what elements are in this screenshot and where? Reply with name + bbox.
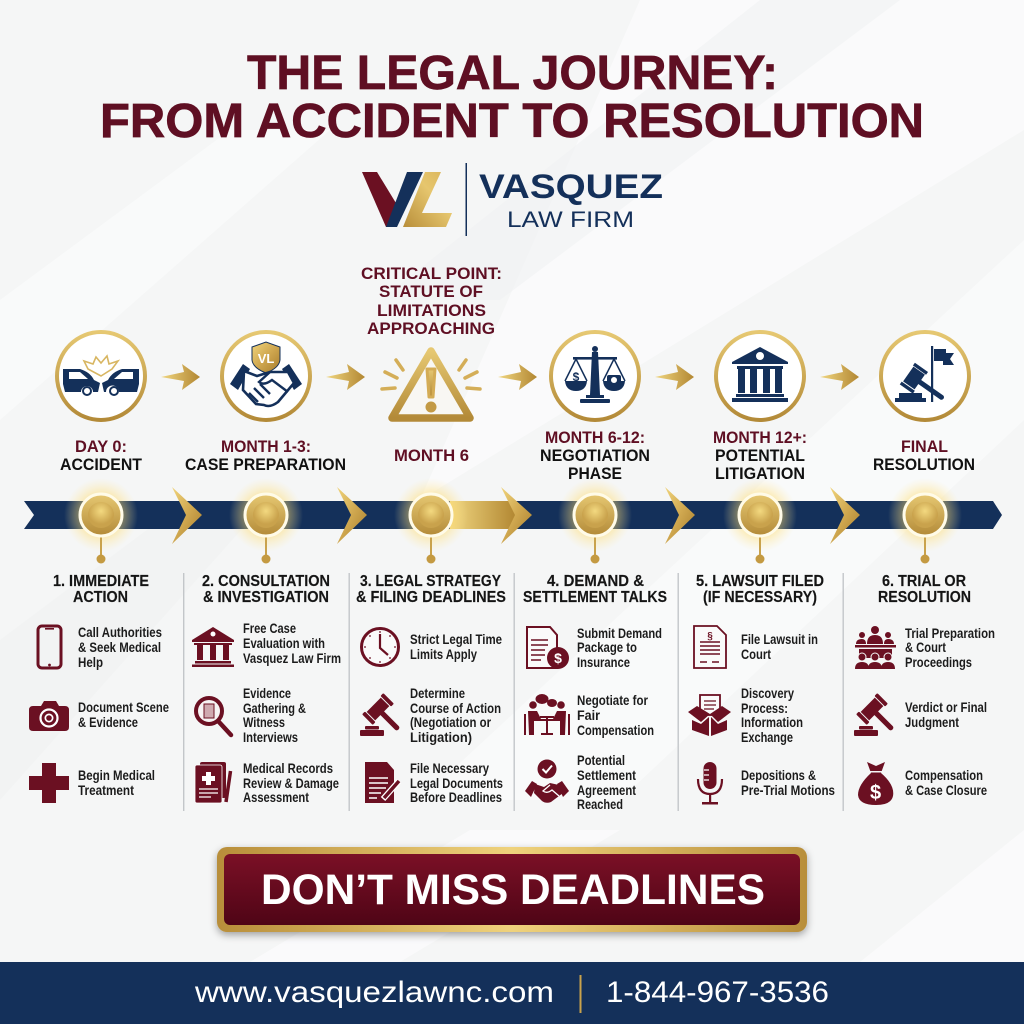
text [577,692,654,738]
icon: car accident [57,332,145,420]
icon: scales of justice: $ [573,370,580,384]
icon: courthouse [192,627,234,667]
text: Course of Action [410,700,501,716]
text: Settlement [577,767,636,783]
heading [53,573,149,606]
timeline label: Day 0: ACCIDENT [60,456,142,474]
icon: lawsuit document: § [707,631,713,642]
callout: critical point: LIMITATIONS [377,302,486,320]
icon: lawsuit document [694,626,726,668]
icon: magnifying glass [196,698,231,735]
text: Negotiate for [577,692,648,708]
text: Witness [243,714,285,730]
text: Discovery [741,685,794,701]
panel: step 4 demand and settlement [523,573,667,812]
timeline label: Month 6-12: PHASE [568,465,622,483]
panel: step 1 immediate action [29,573,169,803]
text: Strict Legal Time [410,631,502,647]
arrow [326,364,365,390]
text: Information [741,714,803,730]
icon: medical cross [29,763,69,803]
node 5 [739,494,781,564]
heading: 1. IMMEDIATE [53,573,149,590]
icon: scales of justice [551,332,639,420]
text: Verdict or Final [905,699,987,715]
text: Call Authorities [78,624,162,640]
node 2 [245,494,287,564]
footer bar [0,962,1024,1024]
heading [356,573,506,606]
text [410,685,501,745]
icon: handshake with shield: VL [258,351,274,366]
node 4 [574,494,616,564]
node 1 [80,494,122,564]
text: Assessment [243,789,309,805]
call to action button [217,847,807,932]
text [905,767,987,798]
text [577,752,636,812]
timeline label: Final: RESOLUTION [873,456,975,474]
text: Compensation [905,767,983,783]
call to action button: DON’T MISS DEADLINES [261,866,765,914]
text: Evidence [243,685,291,701]
timeline label: Month 12+: LITIGATION [715,465,805,483]
text: Free Case [243,620,296,636]
text: Compensation [577,722,654,738]
timeline label: Month 12+: POTENTIAL [715,447,805,465]
text: Reached [577,796,623,812]
timeline label: Month 6: MONTH 6 [394,447,469,465]
logo: Vasquez Law Firm [362,163,663,236]
text [741,685,803,745]
heading: & FILING DEADLINES [356,589,506,606]
icon: courthouse [716,332,804,420]
title [100,47,924,148]
callout: critical point: CRITICAL POINT: [361,265,502,283]
text: & Court [905,639,946,655]
text: Evaluation with [243,635,325,651]
text: Treatment [78,782,134,798]
text: Begin Medical [78,767,155,783]
arrow [498,364,537,390]
heading: & INVESTIGATION [203,589,329,606]
text: (Negotiation or [410,714,491,730]
arrow [820,364,859,390]
footer bar: 1-844-967-3536 [606,976,829,1009]
logo: Vasquez Law Firm: VASQUEZ [479,168,663,206]
heading: 2. CONSULTATION [202,573,330,590]
timeline label: Month 6-12: MONTH 6-12: [545,429,645,447]
icon: settlement handshake [525,760,569,803]
text: Vasquez Law Firm [243,650,341,666]
text: Exchange [741,729,793,745]
panel: step 2 consultation and investigation [192,573,341,805]
text: & Case Closure [905,782,987,798]
text [577,625,662,670]
text: Judgment [905,714,959,730]
node 3 [410,494,452,564]
title: FROM ACCIDENT TO RESOLUTION [100,95,924,148]
heading: (IF NECESSARY) [703,589,817,606]
text [243,685,306,745]
text [410,631,502,662]
text: File Lawsuit in [741,631,818,647]
title: THE LEGAL JOURNEY: [247,47,778,100]
text: Litigation) [410,729,472,745]
icon: phone [38,626,61,668]
icon: gavel and flag [881,332,969,420]
heading [523,573,667,606]
heading [202,573,330,606]
icon: handshake with shield [222,332,310,420]
callout: critical point: STATUTE OF [379,283,483,301]
text: Process: [741,700,788,716]
footer bar: www.vasquezlawnc.com [194,976,554,1009]
text: & Seek Medical [78,639,161,655]
text: Insurance [577,654,630,670]
callout: critical point: APPROACHING [367,320,495,338]
text [410,760,503,805]
heading: 5. LAWSUIT FILED [696,573,824,590]
text: Gathering & [243,700,306,716]
icon: negotiation at table [524,694,570,735]
icon: clock [362,628,398,666]
heading: RESOLUTION [878,589,971,606]
heading [696,573,824,606]
text: Limits Apply [410,646,477,662]
text: Interviews [243,729,298,745]
text: Medical Records [243,760,333,776]
timeline label: Final: FINAL [901,438,948,456]
text: Trial Preparation [905,625,995,641]
text: File Necessary [410,760,489,776]
timeline label: Month 12+: MONTH 12+: [713,429,807,447]
icon: warning triangle [382,351,480,418]
heading: 3. LEGAL STRATEGY [360,573,501,590]
timeline label: Month 1-3: MONTH 1-3: [221,438,311,456]
icon: discovery box [688,695,731,736]
timeline label: Month 12+ [713,429,807,483]
icon: gavel [854,693,903,740]
text: Agreement [577,782,636,798]
text: Court [741,646,771,662]
text [78,767,155,798]
timeline label: Month 1-3: CASE PREPARATION [185,456,346,474]
text: Legal Documents [410,775,503,791]
text: Depositions & [741,767,816,783]
timeline label: Day 0: DAY 0: [75,438,127,456]
callout: critical point [361,265,502,338]
text [905,699,987,730]
text: Document Scene [78,699,169,715]
text: Package to [577,639,637,655]
timeline label: Month 1-3 [185,438,346,474]
arrow [655,364,694,390]
arrow [161,364,200,390]
text [78,699,169,730]
icon: medical records [195,762,230,803]
icon: microphone [698,762,722,804]
text [78,624,162,670]
text: Pre-Trial Motions [741,782,835,798]
node 6 [904,494,946,564]
text: Help [78,654,103,670]
text: Before Deadlines [410,789,502,805]
timeline bar [24,478,1002,552]
text [741,767,835,798]
text [243,760,339,805]
text: Submit Demand [577,625,662,641]
icon: money bag: $ [870,782,881,804]
logo: Vasquez Law Firm: LAW FIRM [507,207,634,232]
heading: ACTION [73,589,128,606]
icon: demand package [527,627,569,669]
panel: step 5 lawsuit filed [688,573,835,804]
text [243,620,341,666]
text: Fair [577,707,600,723]
text [905,625,995,670]
text: Proceedings [905,654,972,670]
timeline label: Day 0 [60,438,142,474]
icon: courtroom [855,626,896,669]
heading: SETTLEMENT TALKS [523,589,667,606]
text: & Evidence [78,714,138,730]
heading: 4. DEMAND & [547,573,644,590]
heading [878,573,971,606]
icon: money bag [858,762,893,805]
text: Determine [410,685,465,701]
text: Review & Damage [243,775,339,791]
panel: step 6 trial or resolution [854,573,995,805]
panel: step 3 legal strategy [356,573,506,805]
icon: camera [29,701,69,731]
text: Potential [577,752,625,768]
icon: demand package: $ [554,650,562,666]
timeline label: Month 6-12 [540,429,650,483]
timeline label: Month 6-12: NEGOTIATION [540,447,650,465]
icon: document and pen [365,762,399,803]
timeline label: Final [873,438,975,474]
icon: gavel [360,693,409,740]
text [741,631,818,662]
heading: 6. TRIAL OR [882,573,966,590]
